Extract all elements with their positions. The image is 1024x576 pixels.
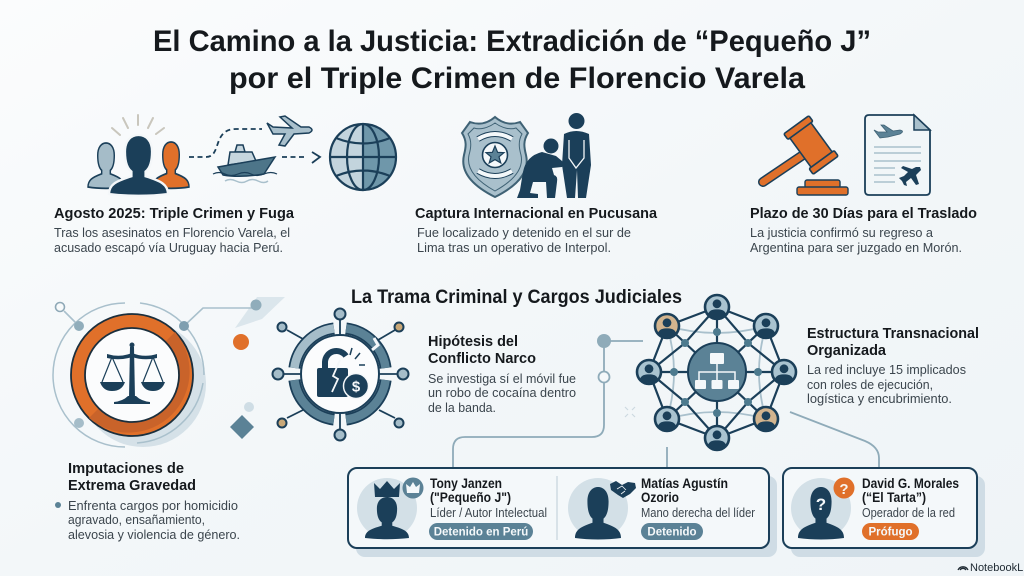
- icon: broken lock hub: [272, 308, 408, 440]
- profile: Matias Agustin Ozorio: Mano derecha del líder: [641, 506, 755, 520]
- connector lines: [453, 334, 879, 468]
- status pill: Detenido: [647, 526, 697, 538]
- heading: Imputaciones de: [68, 460, 184, 477]
- text block: acusado escapó vía Uruguay hacia Perú.: [54, 240, 283, 255]
- icon: globe: [330, 124, 396, 190]
- icon: police badge: [462, 117, 528, 197]
- profile: Matias Agustin Ozorio: Matías Agustín: [641, 476, 728, 491]
- profile: Tony Janzen: [357, 476, 547, 540]
- decorative dots: [230, 334, 254, 439]
- icon: travel document: [865, 115, 930, 195]
- bullet text: [55, 498, 240, 542]
- profile: Tony Janzen: Líder / Autor Intelectual: [430, 506, 547, 520]
- panel: captura internacional: [415, 113, 658, 255]
- card: detained leaders: [348, 468, 777, 557]
- title: por el Triple Crimen de Florencio Varela: [229, 62, 805, 95]
- heading: Agosto 2025: Triple Crimen y Fuga: [54, 205, 295, 222]
- profile: David G. Morales: Operador de la red: [862, 506, 955, 520]
- panel: plazo de 30 dias: [750, 115, 977, 255]
- card: fugitive: [783, 468, 985, 557]
- text block: [428, 371, 576, 415]
- heading: [428, 333, 536, 367]
- icon: three people: [88, 115, 189, 196]
- icon: arrest figures: [517, 113, 591, 198]
- text block: Argentina para ser juzgado en Morón.: [750, 240, 962, 255]
- heading: Captura Internacional en Pucusana: [415, 205, 658, 222]
- text block: logística y encubrimiento.: [807, 391, 952, 406]
- text block: Tras los asesinatos en Florencio Varela, el: [54, 225, 290, 240]
- panel: imputaciones: [53, 297, 285, 542]
- text block: [417, 225, 631, 255]
- text block: de la banda.: [428, 400, 496, 415]
- status pill: [641, 523, 703, 540]
- text block: La red incluye 15 implicados: [807, 362, 966, 377]
- text block: Fue localizado y detenido en el sur de: [417, 225, 631, 240]
- profile: Matias Agustin Ozorio: Ozorio: [641, 490, 679, 505]
- title: El Camino a la Justicia: Extradición de “Pequeño J”: [153, 25, 871, 58]
- status pill: [429, 523, 533, 540]
- text block: Lima tras un operativo de Interpol.: [417, 240, 611, 255]
- section heading: La Trama Criminal y Cargos Judiciales: [351, 287, 682, 308]
- icon: gavel: [763, 116, 848, 195]
- profile: David G. Morales: [791, 476, 959, 540]
- status pill: Detenido en Perú: [434, 526, 528, 538]
- profile: David G. Morales: David G. Morales: [862, 476, 959, 491]
- profile: Tony Janzen: ("Pequeño J"): [430, 490, 511, 505]
- heading: Hipótesis del: [428, 333, 518, 350]
- profile: Tony Janzen: Tony Janzen: [430, 476, 502, 491]
- panel: triple crimen y fuga: [54, 115, 396, 255]
- profile: David G. Morales: ?: [816, 495, 826, 514]
- panel: conflicto narco: [272, 308, 576, 440]
- icon: network diagram: [637, 295, 796, 450]
- text block: con roles de ejecución,: [807, 377, 933, 392]
- icon: escape route with plane and ship: [189, 116, 320, 182]
- profile: David G. Morales: (“El Tarta”): [862, 490, 926, 505]
- text block: [54, 225, 290, 255]
- heading: [68, 460, 196, 494]
- bullet text: alevosia y violencia de género.: [68, 527, 240, 542]
- profile: Matias Agustin Ozorio: [568, 476, 755, 540]
- title: [153, 25, 871, 95]
- status pill: [862, 523, 919, 540]
- heading: Plazo de 30 Días para el Traslado: [750, 205, 977, 222]
- bullet text: agravado, ensañamiento,: [68, 512, 205, 527]
- heading: Conflicto Narco: [428, 350, 536, 367]
- bullet text: Enfrenta cargos por homicidio: [68, 498, 238, 513]
- profile: David G. Morales: ?: [839, 481, 849, 498]
- heading: [807, 325, 979, 359]
- text block: un robo de cocaína dentro: [428, 385, 576, 400]
- text block: La justicia confirmó su regreso a: [750, 225, 934, 240]
- heading: Organizada: [807, 342, 887, 359]
- icon: scales of justice ring: [53, 297, 285, 447]
- heading: Extrema Gravedad: [68, 477, 196, 494]
- status pill: Prófugo: [868, 526, 913, 538]
- text block: [750, 225, 962, 255]
- text block: [807, 362, 966, 406]
- icon: broken lock hub: $: [352, 378, 361, 396]
- heading: Estructura Transnacional: [807, 325, 979, 342]
- text block: Se investiga sí el móvil fue: [428, 371, 576, 386]
- panel: estructura transnacional: [637, 295, 979, 450]
